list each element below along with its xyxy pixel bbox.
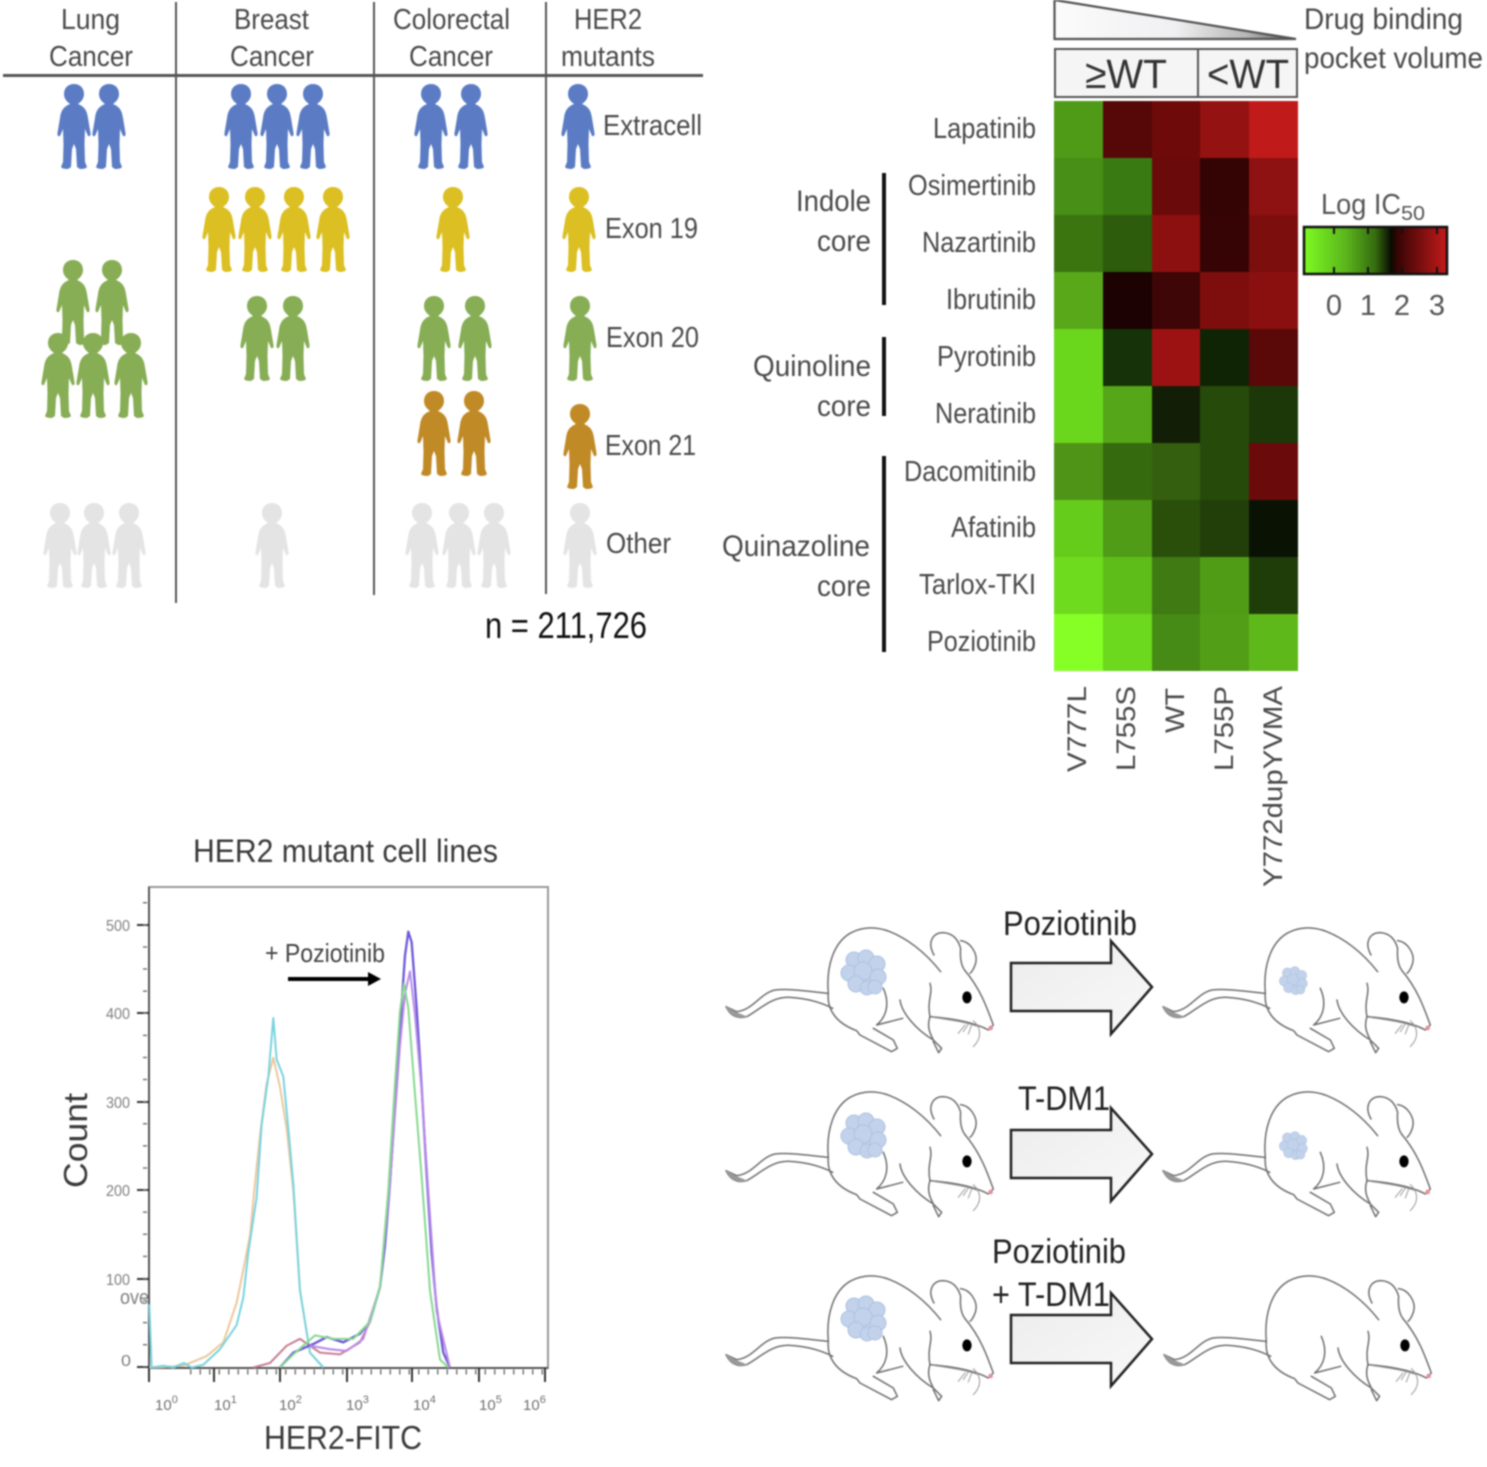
column headings	[49, 4, 655, 73]
y axis tick labels: 300	[106, 1095, 130, 1112]
core class brackets	[882, 173, 886, 652]
panel: mouse treatment model	[726, 905, 1431, 1401]
x axis tick labels: 10	[346, 1397, 363, 1414]
x axis tick labels: 10	[279, 1397, 296, 1414]
y axis tick labels: ove	[120, 1287, 149, 1309]
column headings: Colorectal	[393, 4, 510, 36]
colour legend	[1304, 189, 1447, 322]
drug labels: Ibrutinib	[946, 284, 1036, 316]
drug labels: Dacomitinib	[904, 456, 1036, 488]
x axis tick labels: 6	[540, 1394, 546, 1406]
axis titles: HER2-FITC	[264, 1419, 422, 1456]
drug labels: Lapatinib	[933, 113, 1036, 145]
poziotinib shift annotation	[265, 938, 385, 986]
row: poziotinib	[726, 905, 1430, 1053]
poziotinib shift annotation: + Poziotinib	[265, 938, 385, 968]
x axis tick labels: 4	[430, 1394, 436, 1406]
y axis tick labels: 500	[106, 918, 130, 935]
orange pictograms: exon 21	[417, 391, 597, 489]
mutant class labels	[603, 110, 702, 560]
x axis tick labels: 10	[155, 1397, 172, 1414]
drug labels: Nazartinib	[922, 227, 1036, 259]
pocket volume wedge	[1054, 0, 1296, 39]
column headings: mutants	[561, 41, 655, 73]
mutant column labels: WT	[1160, 688, 1190, 733]
mutant column labels: L755S	[1111, 686, 1141, 771]
colour legend: 3	[1429, 290, 1445, 322]
column headings: Cancer	[409, 41, 493, 73]
colour legend: Log IC	[1321, 189, 1401, 221]
panel: drug sensitivity heatmap	[722, 0, 1483, 887]
drug labels	[904, 113, 1036, 658]
drug labels: Afatinib	[951, 512, 1036, 544]
row: combination: Poziotinib	[992, 1233, 1126, 1271]
core class labels: core	[817, 390, 871, 423]
row: T-DM1: T-DM1	[1018, 1080, 1110, 1118]
core class labels: Indole	[796, 185, 871, 218]
row: combination	[726, 1233, 1431, 1401]
mutant class labels: Exon 21	[605, 430, 696, 462]
column headings: Lung	[61, 4, 120, 36]
green pictograms: exon 20	[41, 260, 597, 418]
mutant column labels: V777L	[1062, 686, 1092, 772]
panel: flow cytometry histogram	[57, 833, 548, 1456]
plot frame	[149, 887, 548, 1368]
drug labels: Tarlox-TKI	[919, 569, 1036, 601]
mutant column labels: Y772dupYVMA	[1258, 686, 1288, 887]
mutant class labels: Extracell	[603, 110, 702, 142]
drug labels: Osimertinib	[908, 170, 1036, 202]
panel: mutation prevalence pictogram	[3, 2, 703, 646]
mutant column labels: L755P	[1209, 686, 1239, 771]
pocket volume label: Drug binding	[1304, 3, 1463, 36]
row: T-DM1	[726, 1080, 1430, 1217]
y axis tick labels	[106, 918, 149, 1370]
x axis tick labels: 1	[231, 1394, 237, 1406]
x axis tick labels: 10	[413, 1397, 430, 1414]
colour legend: 50	[1401, 203, 1425, 225]
core class labels	[722, 185, 871, 603]
wild type comparison header: ≥WT	[1085, 51, 1167, 97]
mutant class labels: Exon 20	[606, 322, 699, 354]
yellow pictograms: exon 19	[202, 187, 596, 272]
grey pictograms: other	[43, 503, 597, 588]
drug labels: Pyrotinib	[937, 341, 1036, 373]
wild type comparison header	[1055, 49, 1297, 97]
y axis tick labels: 0	[121, 1353, 131, 1370]
column headings: HER2	[574, 4, 642, 36]
axis titles	[57, 1093, 422, 1456]
colour legend: 2	[1394, 290, 1410, 322]
heatmap cells	[1054, 101, 1298, 671]
drug labels: Neratinib	[935, 398, 1036, 430]
drug labels: Poziotinib	[927, 626, 1036, 658]
sample size: n = 211,726	[485, 605, 647, 646]
column headings: Breast	[234, 4, 309, 36]
colour legend: 0	[1326, 290, 1342, 322]
blue pictograms: extracellular	[57, 84, 595, 169]
y axis tick labels: 100	[106, 1272, 130, 1289]
core class labels: core	[817, 225, 871, 258]
x axis tick labels: 10	[479, 1397, 496, 1414]
x axis tick labels: 2	[296, 1394, 302, 1406]
chart title: HER2 mutant cell lines	[193, 833, 498, 869]
wild type comparison header: <WT	[1207, 51, 1289, 97]
row: poziotinib: Poziotinib	[1003, 905, 1137, 943]
x axis tick labels: 0	[172, 1394, 178, 1406]
colour legend: 1	[1360, 290, 1376, 322]
mutant class labels: Exon 19	[605, 213, 698, 245]
axis ticks	[137, 887, 548, 1382]
mutant column labels	[1062, 686, 1288, 887]
row: combination: + T-DM1	[992, 1276, 1110, 1314]
x axis tick labels	[155, 1394, 546, 1414]
column headings: Cancer	[230, 41, 314, 73]
y axis tick labels: 400	[106, 1006, 130, 1023]
axis titles: Count	[57, 1093, 94, 1188]
column headings: Cancer	[49, 41, 133, 73]
histogram curves	[149, 932, 450, 1367]
x axis tick labels: 10	[214, 1397, 231, 1414]
core class labels: Quinoline	[753, 350, 871, 383]
pocket volume label	[1304, 3, 1483, 75]
y axis tick labels: 200	[106, 1183, 130, 1200]
x axis tick labels: 5	[496, 1394, 502, 1406]
core class labels: core	[817, 570, 871, 603]
mutant class labels: Other	[606, 528, 671, 560]
core class labels: Quinazoline	[722, 530, 870, 563]
x axis tick labels: 10	[523, 1397, 540, 1414]
x axis tick labels: 3	[363, 1394, 369, 1406]
